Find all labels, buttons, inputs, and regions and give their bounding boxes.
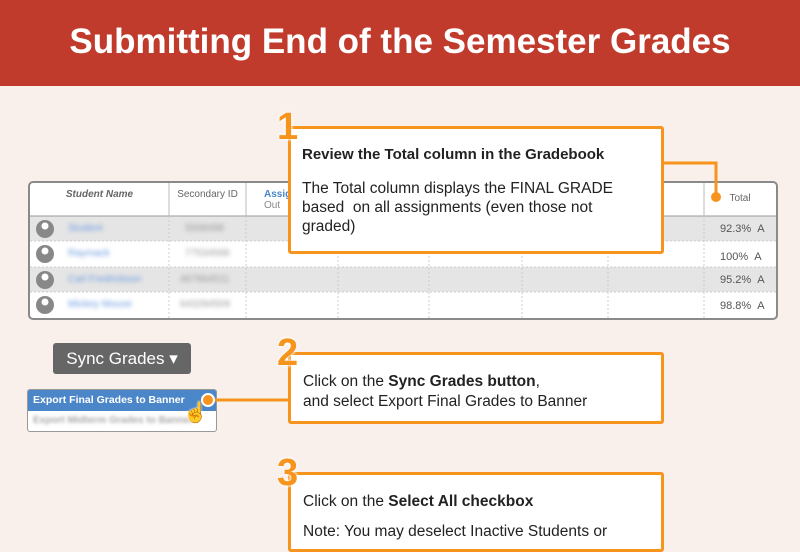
number 2: 2 bbox=[277, 332, 298, 374]
step 2 box: and select Export Final Grades to Banner bbox=[303, 393, 587, 410]
number 1: 1 bbox=[277, 106, 298, 148]
gradebook table: Secondary ID bbox=[177, 189, 238, 200]
gradebook table: 95.2% A bbox=[720, 274, 765, 286]
icon: hand cursor: ☝ bbox=[183, 402, 208, 424]
gradebook table: 100% A bbox=[720, 251, 762, 263]
step 1 box: The Total column displays the FINAL GRADE bbox=[302, 180, 613, 197]
gradebook table bbox=[28, 181, 778, 320]
step 1 box bbox=[288, 126, 664, 254]
gradebook table: Student bbox=[68, 223, 102, 234]
gradebook table: Raymack bbox=[68, 248, 110, 259]
connector 2 bbox=[201, 393, 288, 407]
step 2 box bbox=[288, 352, 664, 424]
gradebook table: 467864511 bbox=[180, 274, 229, 285]
title banner: Submitting End of the Semester Grades bbox=[69, 22, 731, 61]
dropdown menu: Export Final Grades to Banner bbox=[33, 394, 185, 406]
gradebook table: Assig bbox=[264, 189, 291, 200]
gradebook table: Carl Fredrickson bbox=[68, 274, 141, 285]
step 1 box: Review the Total column in the Gradebook bbox=[302, 146, 604, 163]
step 3 box bbox=[288, 472, 664, 552]
gradebook table: 77534568 bbox=[185, 248, 230, 259]
gradebook table: Total bbox=[729, 193, 751, 204]
gradebook table: 98.8% A bbox=[720, 300, 765, 312]
title banner bbox=[0, 0, 800, 86]
number 3: 3 bbox=[277, 452, 298, 494]
sync grades button bbox=[53, 343, 191, 374]
connector 1 bbox=[664, 162, 721, 202]
dropdown menu bbox=[27, 389, 217, 432]
gradebook table: Student Name bbox=[66, 189, 133, 200]
sync grades button: Sync Grades ▾ bbox=[66, 349, 178, 368]
step 2 box: Click on the Sync Grades button, bbox=[303, 373, 540, 390]
gradebook table: 643284509 bbox=[180, 299, 230, 310]
dropdown menu: Export Midterm Grades to Banner bbox=[33, 415, 193, 426]
gradebook table: 5568498 bbox=[185, 223, 224, 234]
step 3 box: Note: You may deselect Inactive Students or bbox=[303, 523, 607, 540]
gradebook table: Out bbox=[264, 200, 280, 211]
step 1 box: graded) bbox=[302, 218, 355, 235]
gradebook table: Mickey Mouse bbox=[68, 299, 132, 310]
step 3 box: Click on the Select All checkbox bbox=[303, 493, 533, 510]
gradebook table: 92.3% A bbox=[720, 223, 765, 235]
step 1 box: based on all assignments (even those not bbox=[302, 199, 592, 216]
